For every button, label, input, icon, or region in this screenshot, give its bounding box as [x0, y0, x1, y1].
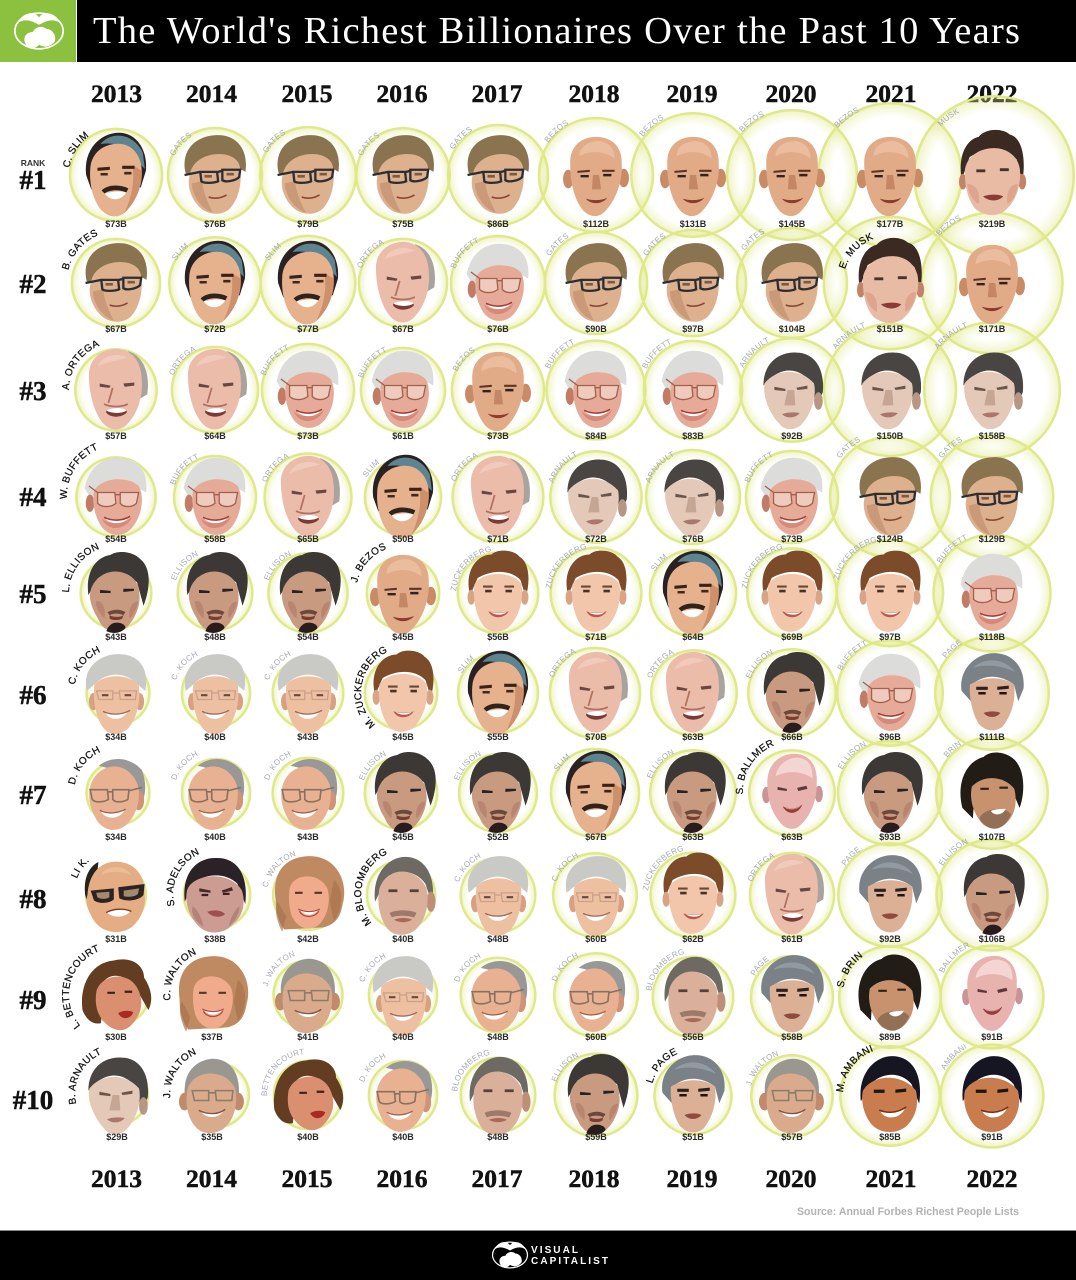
- rank 9 row: C. KOCH: [357, 951, 387, 983]
- rank labels: #3: [20, 376, 46, 406]
- rank 9 row: PAGE: [749, 954, 771, 977]
- rank 7 row: $107B: [979, 832, 1006, 842]
- bottom year headings: 2020: [766, 1164, 816, 1193]
- rank 7 row: $40B: [204, 832, 226, 842]
- rank 8 row: $106B: [979, 934, 1006, 944]
- rank 5 row: [62, 534, 1022, 642]
- rank 9 row: L. BETTENCOURT: [61, 943, 101, 1031]
- rank 2 row: $67B: [392, 324, 414, 334]
- bottom year headings: 2018: [568, 1164, 620, 1193]
- rank 6 row: $40B: [204, 732, 226, 742]
- rank 7 row: $43B: [297, 832, 319, 842]
- top year headings: 2022: [966, 79, 1018, 108]
- rank 5 row: $64B: [682, 632, 704, 642]
- rank 8 row: S. ADELSON: [165, 846, 201, 907]
- rank 1 row: GATES: [263, 130, 285, 152]
- rank 2 row: GATES: [546, 233, 568, 256]
- rank 5 row: $54B: [297, 632, 319, 642]
- footer logo: [493, 1242, 527, 1268]
- rank 10 row: J. WALTON: [162, 1046, 198, 1098]
- rank 6 row: $96B: [879, 732, 901, 742]
- bottom year headings: 2016: [376, 1164, 428, 1193]
- rank 10 row: BLOOMBERG: [450, 1048, 491, 1092]
- rank 9 row: J. WALTON: [261, 949, 296, 987]
- rank 10 row: $59B: [585, 1132, 607, 1142]
- top year headings: 2018: [568, 79, 620, 108]
- rank 4 row: ORTEGA: [262, 454, 289, 482]
- rank 1 row: BEZOS: [639, 115, 664, 136]
- logo badge: [0, 0, 76, 62]
- rank 10 row: BETTENCOURT: [260, 1047, 305, 1096]
- rank 9 row: $30B: [105, 1032, 127, 1042]
- rank 7 row: ELLISON: [357, 749, 388, 782]
- bottom year headings: 2014: [186, 1164, 237, 1193]
- rank 4 row: $71B: [487, 534, 509, 544]
- top year headings: 2019: [666, 79, 718, 108]
- rank 6 row: $43B: [297, 732, 319, 742]
- rank 1 row: BEZOS: [738, 111, 764, 132]
- rank 4 row: [60, 437, 1023, 544]
- rank 6 row: PAGE: [941, 638, 964, 660]
- rank labels: #5: [20, 579, 46, 609]
- rank 10 row: $35B: [201, 1132, 223, 1142]
- rank 5 row: $71B: [585, 632, 607, 642]
- rank 3 row: BUFFETT: [260, 344, 288, 376]
- rank 8 row: $38B: [204, 934, 226, 944]
- rank 1 row: $145B: [779, 219, 806, 229]
- rank 2 row: $67B: [105, 324, 127, 334]
- rank 1 row: $79B: [297, 219, 319, 229]
- rank 5 row: ZUCKERBERG: [740, 542, 784, 589]
- rank labels: #8: [20, 884, 46, 914]
- rank 7 row: $52B: [487, 832, 509, 842]
- rank 4 row: $54B: [105, 534, 127, 544]
- rank 7 row: D. KOCH: [262, 749, 292, 781]
- rank 7 row: $63B: [682, 832, 704, 842]
- rank 9 row: $48B: [487, 1032, 509, 1042]
- bubble rings sized by net worth: [70, 96, 1074, 1147]
- footer wordmark: [531, 1245, 608, 1267]
- rank 2 row: $76B: [487, 324, 509, 334]
- rank labels: RANK: [21, 158, 46, 168]
- rank 8 row: ZUCKERBERG: [641, 844, 685, 891]
- rank 3 row: ARNAULT: [833, 322, 864, 350]
- rank 1 row: $86B: [487, 219, 509, 229]
- rank 7 row: $34B: [105, 832, 127, 842]
- rank 6 row: ORTEGA: [547, 646, 578, 679]
- rank 6 row: ORTEGA: [645, 647, 676, 679]
- rank labels: #6: [20, 680, 46, 710]
- rank 7 row: ELLISON: [836, 739, 868, 771]
- rank 5 row: ELLISON: [262, 549, 293, 582]
- rank 2 row: E. MUSK: [838, 232, 874, 269]
- top year headings: 2015: [282, 79, 332, 108]
- rank 9 row: [62, 942, 1023, 1042]
- rank 3 row: $57B: [105, 431, 127, 441]
- rank 5 row: $118B: [979, 632, 1006, 642]
- rank 4 row: $76B: [682, 534, 704, 544]
- rank 9 row: BALLMER: [937, 940, 971, 974]
- rank 9 row: BLOOMBERG: [644, 947, 685, 991]
- rank 4 row: ARNAULT: [548, 451, 576, 484]
- rank 4 row: BUFFETT: [744, 451, 772, 482]
- rank 5 row: ZUCKERBERG: [449, 545, 492, 591]
- rank 1 row: $219B: [979, 219, 1006, 229]
- rank 10 row: $48B: [487, 1132, 509, 1142]
- rank 6 row: ELLISON: [744, 647, 775, 680]
- rank 3 row: ARNAULT: [740, 337, 768, 368]
- rank 8 row: $42B: [297, 934, 319, 944]
- rank 4 row: SLIM: [363, 459, 379, 477]
- rank 9 row: $91B: [981, 1032, 1003, 1042]
- rank 1 row: [63, 108, 1026, 229]
- rank 4 row: W. BUFFETT: [60, 442, 96, 499]
- bottom year headings: 2019: [666, 1164, 718, 1193]
- rank 6 row: $63B: [682, 732, 704, 742]
- header bar: [0, 0, 1076, 62]
- rank 10 row: D. KOCH: [357, 1051, 387, 1083]
- top year headings: [91, 79, 1018, 108]
- rank 2 row: [62, 216, 1025, 334]
- rank 8 row: C. KOCH: [550, 851, 580, 883]
- rank 3 row: $64B: [204, 431, 226, 441]
- rank 5 row: SLIM: [649, 552, 669, 573]
- rank 5 row: ELLISON: [169, 549, 200, 582]
- rank 5 row: $69B: [781, 632, 803, 642]
- rank 3 row: $158B: [979, 431, 1006, 441]
- rank 2 row: GATES: [644, 233, 666, 256]
- rank 3 row: $73B: [487, 431, 509, 441]
- rank 4 row: $124B: [877, 534, 904, 544]
- rank 6 row: BUFFETT: [836, 639, 869, 672]
- rank 6 row: M. ZUCKERBERG: [353, 644, 389, 730]
- rank 1 row: $73B: [105, 219, 127, 229]
- rank 10 row: ELLISON: [550, 1051, 580, 1083]
- rank labels: #2: [20, 269, 46, 299]
- rank 2 row: $171B: [979, 324, 1006, 334]
- bottom year headings: 2021: [866, 1164, 916, 1193]
- rank labels: #1: [20, 165, 46, 195]
- rank 3 row: $84B: [585, 431, 607, 441]
- rank labels: #9: [20, 985, 46, 1015]
- rank 4 row: $65B: [297, 534, 319, 544]
- rank 8 row: ORTEGA: [746, 850, 776, 883]
- footer wordmark: CAPITALIST: [531, 1256, 608, 1267]
- rank 8 row: $62B: [682, 934, 704, 944]
- rank 3 row: ARNAULT: [935, 322, 966, 350]
- rank labels: #10: [13, 1085, 53, 1115]
- rank 8 row: C. WALTON: [261, 849, 297, 888]
- rank 6 row: $45B: [392, 732, 414, 742]
- rank 5 row: $43B: [105, 632, 127, 642]
- rank 7 row: $93B: [879, 832, 901, 842]
- rank 7 row: [68, 740, 1024, 842]
- rank 6 row: C. KOCH: [262, 649, 292, 681]
- rank 6 row: $66B: [781, 732, 803, 742]
- bottom year headings: 2013: [91, 1164, 142, 1193]
- rank 8 row: M. BLOOMBERG: [353, 846, 389, 928]
- rank 3 row: $83B: [682, 431, 704, 441]
- rank 10 row: AMBANI: [939, 1042, 968, 1071]
- rank 7 row: BRIN: [942, 739, 963, 759]
- rank 10 row: $29B: [106, 1132, 128, 1142]
- rank 2 row: $90B: [585, 324, 607, 334]
- rank 2 row: $151B: [877, 324, 904, 334]
- rank 7 row: SLIM: [552, 752, 572, 773]
- rank labels: #7: [20, 780, 46, 810]
- rank 5 row: BUFFETT: [935, 533, 969, 565]
- rank 6 row: $34B: [105, 732, 127, 742]
- rank 10 row: L. PAGE: [645, 1046, 679, 1084]
- rank 1 row: GATES: [450, 126, 472, 148]
- rank 4 row: GATES: [939, 437, 962, 458]
- rank 9 row: C. WALTON: [162, 946, 198, 1001]
- rank 1 row: C. SLIM: [63, 131, 88, 167]
- rank 6 row: SLIM: [456, 654, 476, 675]
- rank 8 row: $92B: [879, 934, 901, 944]
- rank 4 row: ORTEGA: [452, 453, 478, 481]
- rank 9 row: D. KOCH: [452, 951, 482, 983]
- rank 3 row: [62, 322, 1024, 441]
- rank 6 row: $55B: [487, 732, 509, 742]
- rank 1 row: $112B: [583, 219, 610, 229]
- rank 5 row: $97B: [879, 632, 901, 642]
- rank 10 row: $40B: [392, 1132, 414, 1142]
- rank 7 row: $67B: [585, 832, 607, 842]
- rank 2 row: $104B: [779, 324, 806, 334]
- rank 9 row: $56B: [682, 1032, 704, 1042]
- footer wordmark: VISUAL: [531, 1245, 578, 1256]
- rank 1 row: GATES: [358, 132, 380, 156]
- rank 2 row: ORTEGA: [358, 240, 384, 268]
- rank 5 row: ZUCKERBERG: [544, 542, 588, 589]
- top year headings: 2017: [472, 79, 523, 108]
- rank 2 row: BUFFETT: [450, 237, 478, 268]
- rank 6 row: [68, 640, 1024, 742]
- rank 3 row: BUFFETT: [642, 338, 670, 368]
- rank 1 row: $131B: [680, 219, 707, 229]
- rank 8 row: $31B: [105, 934, 127, 944]
- rank 3 row: A. ORTEGA: [62, 340, 100, 390]
- footer bar: [0, 1230, 1076, 1280]
- rank 5 row: $48B: [204, 632, 226, 642]
- rank 3 row: ORTEGA: [170, 346, 196, 374]
- rank 3 row: BEZOS: [452, 348, 474, 371]
- rank 9 row: $58B: [781, 1032, 803, 1042]
- rank labels: #4: [20, 482, 46, 512]
- rank 8 row: LI K.: [70, 855, 92, 880]
- rank 2 row: $77B: [297, 324, 319, 334]
- rank 10 row: $85B: [879, 1132, 901, 1142]
- title: The World's Richest Billionaires Over the Past 10 Years: [93, 10, 1020, 52]
- rank 3 row: BUFFETT: [358, 346, 386, 378]
- rank 5 row: J. BEZOS: [349, 541, 388, 584]
- rank 7 row: D. KOCH: [67, 744, 102, 786]
- rank 8 row: C. KOCH: [452, 851, 482, 883]
- rank 9 row: $37B: [201, 1032, 223, 1042]
- rank 8 row: $60B: [585, 934, 607, 944]
- rank 8 row: [70, 838, 1025, 944]
- rank 9 row: $89B: [879, 1032, 901, 1042]
- rank 1 row: GATES: [170, 132, 192, 156]
- rank 2 row: $97B: [682, 324, 704, 334]
- rank 4 row: $73B: [781, 534, 803, 544]
- rank 3 row: $150B: [877, 431, 904, 441]
- rank 3 row: $92B: [781, 431, 803, 441]
- rank 1 row: BEZOS: [544, 120, 568, 142]
- rank 9 row: $60B: [585, 1032, 607, 1042]
- bottom year headings: 2022: [966, 1164, 1018, 1193]
- rank 10 row: M. AMBANI: [835, 1043, 875, 1093]
- rank 10 row: $51B: [682, 1132, 704, 1142]
- rank 2 row: SLIM: [265, 242, 281, 260]
- source note: Source: Annual Forbes Richest People Lists: [797, 1206, 1019, 1218]
- rank 2 row: $72B: [204, 324, 226, 334]
- rank 1 row: $177B: [877, 219, 904, 229]
- rank 5 row: $45B: [392, 632, 414, 642]
- rank 3 row: BUFFETT: [544, 338, 573, 368]
- rank 1 row: MUSK: [938, 108, 960, 126]
- rank 4 row: $129B: [979, 534, 1006, 544]
- rank 2 row: BEZOS: [936, 216, 961, 236]
- rank 5 row: $56B: [487, 632, 509, 642]
- rank 5 row: L. ELLISON: [61, 541, 101, 593]
- rank 1 row: $76B: [204, 219, 226, 229]
- rank 2 row: GATES: [742, 228, 764, 250]
- rank 4 row: BUFFETT: [170, 454, 198, 484]
- rank 8 row: $61B: [781, 934, 803, 944]
- rank 8 row: $48B: [487, 934, 509, 944]
- rank 10 row: J. WALTON: [744, 1049, 780, 1087]
- rank 7 row: $63B: [781, 832, 803, 842]
- rank 10 row: [68, 1044, 1022, 1142]
- bottom year headings: 2017: [472, 1164, 523, 1193]
- rank 8 row: PAGE: [840, 845, 862, 867]
- rank 2 row: B. GATES: [62, 230, 98, 270]
- rank 5 row: ZUCKERBERG: [832, 535, 878, 581]
- rank 3 row: $73B: [297, 431, 319, 441]
- top year headings: 2013: [91, 79, 142, 108]
- rank 7 row: ELLISON: [645, 747, 676, 780]
- rank 6 row: $111B: [979, 732, 1005, 742]
- rank 4 row: $72B: [585, 534, 607, 544]
- rank 1 row: BEZOS: [834, 108, 859, 128]
- rank 4 row: $58B: [204, 534, 226, 544]
- rank 2 row: SLIM: [172, 242, 188, 260]
- rank 7 row: D. KOCH: [169, 749, 199, 781]
- rank 3 row: $61B: [392, 431, 414, 441]
- rank 10 row: $40B: [297, 1132, 319, 1142]
- rank 4 row: ARNAULT: [646, 451, 673, 484]
- rank 9 row: S. BRIN: [836, 950, 865, 989]
- rank 4 row: $50B: [392, 534, 414, 544]
- bottom year headings: [91, 1164, 1018, 1193]
- rank 7 row: $45B: [392, 832, 414, 842]
- rank 6 row: C. KOCH: [67, 644, 102, 686]
- rank 9 row: D. KOCH: [550, 951, 580, 983]
- rank 10 row: B. ARNAULT: [67, 1046, 103, 1105]
- top year headings: 2014: [186, 79, 237, 108]
- rank 10 row: $91B: [981, 1132, 1003, 1142]
- rank 7 row: ELLISON: [452, 749, 483, 782]
- rank 8 row: ELLISON: [937, 837, 969, 867]
- rank 7 row: S. BALLMER: [735, 738, 776, 795]
- top year headings: 2016: [376, 79, 428, 108]
- top year headings: 2021: [866, 79, 916, 108]
- bottom year headings: 2015: [282, 1164, 332, 1193]
- rank 6 row: $70B: [585, 732, 607, 742]
- top year headings: 2020: [766, 79, 816, 108]
- rank labels: [13, 158, 53, 1115]
- rank 10 row: $57B: [781, 1132, 803, 1142]
- rank 6 row: C. KOCH: [169, 649, 199, 681]
- rank 4 row: GATES: [837, 437, 860, 458]
- rank 8 row: $40B: [392, 934, 414, 944]
- rank 1 row: $75B: [392, 219, 414, 229]
- rank 9 row: $41B: [297, 1032, 319, 1042]
- rank 9 row: $40B: [392, 1032, 414, 1042]
